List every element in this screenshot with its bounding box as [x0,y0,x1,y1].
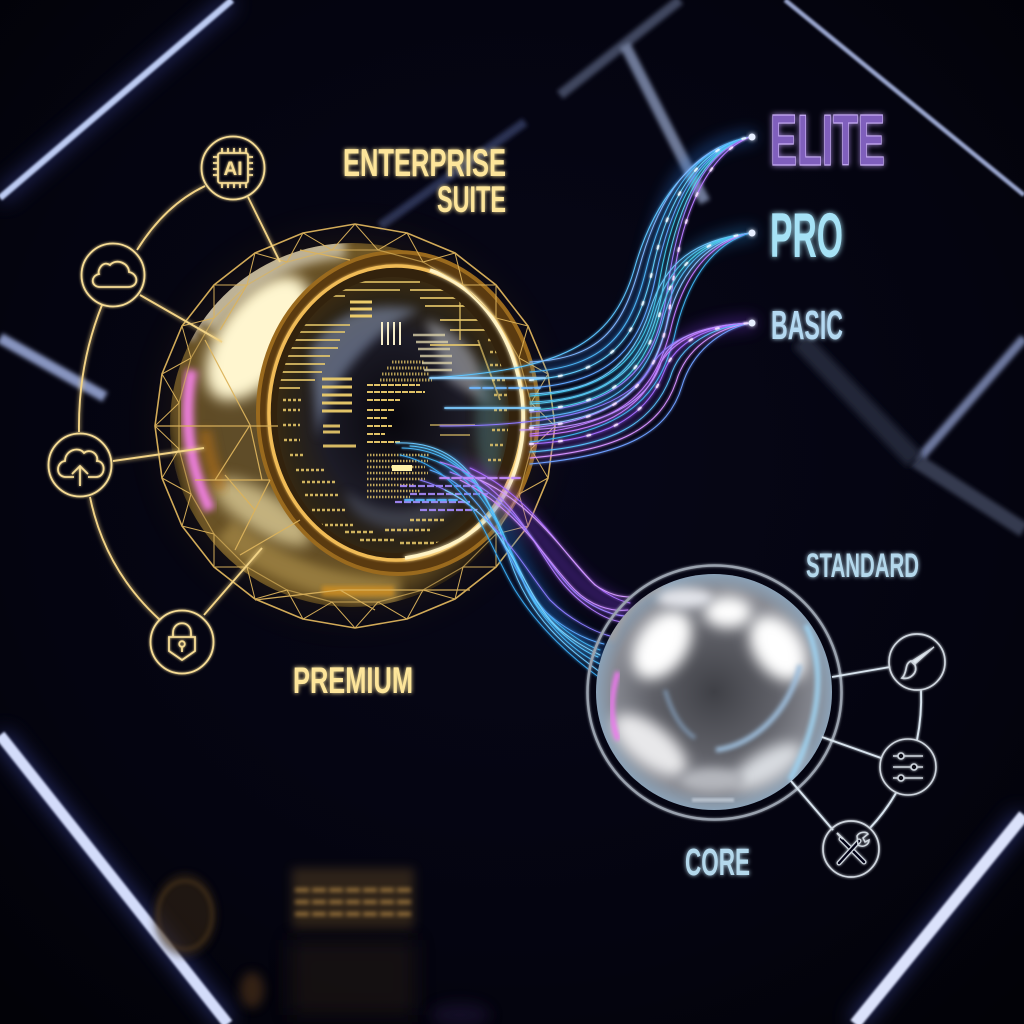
icon: crossed tools [823,821,879,877]
gold lens ring [258,252,538,574]
lower fibers [396,443,632,678]
tier endpoint dots [748,134,756,326]
silver sphere body [596,574,832,810]
silver connector network [791,667,921,830]
label: enterprise suite: ENTERPRISE [343,142,506,185]
fibers to Pro [530,233,750,442]
fibers to Basic [440,323,750,464]
fiber sparkles [530,137,750,444]
icon: sliders [880,739,936,795]
gold wireframe shell [155,224,555,628]
label: enterprise suite: SUITE [437,179,506,220]
lower fiber glow [450,465,625,658]
silver outer ring [588,566,842,820]
gold sphere highlights [170,243,406,606]
label: basic: BASIC [771,302,843,348]
gold sphere halo [162,235,542,615]
gold sphere body [170,243,534,607]
icon: paint brush [889,634,945,690]
label: pro: PRO [770,201,843,271]
icon: lock [150,610,214,674]
silver sphere highlights [603,585,818,802]
icon: AI chip: AI [224,159,242,180]
fibers to Elite [430,137,750,428]
fiber bundle: sphere to Elite, Pro, Basic [430,134,756,464]
fiber glow [540,137,750,450]
icon: cloud [82,244,144,306]
label: standard: STANDARD [806,547,919,585]
lens data streaks [405,378,545,500]
lens bright inner rim [405,270,523,558]
icon: AI chip [202,136,264,200]
fiber bundle: gold sphere to silver sphere [396,378,632,678]
label: enterprise suite [343,142,506,220]
label: elite: ELITE [770,101,885,181]
floor reflection [153,868,490,1024]
panel: standard silver sphere [588,566,842,820]
label: premium: PREMIUM [293,660,413,701]
label: core: CORE [685,842,750,884]
lens glass with code [277,277,510,553]
gold connector network [79,186,280,620]
panel: premium gold sphere [120,224,555,628]
icon: cloud upload [48,434,112,496]
